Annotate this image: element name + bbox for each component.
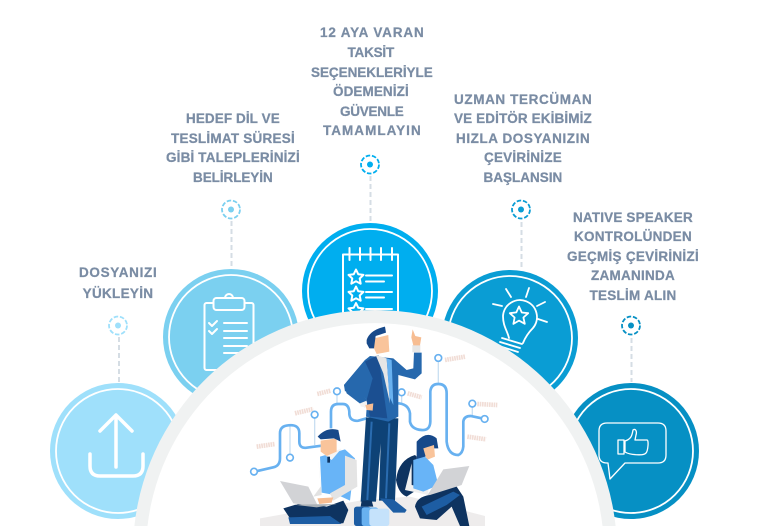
connector: step 3: [370, 176, 372, 222]
text: step 2: [166, 111, 300, 185]
text: step 4: BAŞLANSIN: [484, 170, 562, 185]
platform: [260, 497, 485, 526]
text: step 5: ZAMANINDA: [591, 268, 675, 283]
text: step 3: ÖDEMENİZİ: [333, 84, 409, 99]
seated man with laptop: [280, 429, 357, 524]
text: step 3: SEÇENEKLERİYLE: [311, 65, 433, 80]
text: step 5: KONTROLÜNDEN: [574, 229, 692, 244]
text: step 4: HIZLA DOSYANIZIN: [456, 131, 590, 146]
text: step 1: [79, 265, 157, 301]
text: step 1: DOSYANIZI: [79, 265, 157, 280]
text: step 5: [567, 210, 699, 303]
step 1 circle: upload: [50, 383, 186, 519]
text: step 4: VE EDİTÖR EKİBİMİZ: [454, 111, 592, 126]
icon: speech bubble with thumb: [599, 423, 666, 479]
text: step 2: BELİRLEYİN: [193, 170, 273, 185]
text: step 5: TESLİM ALIN: [590, 288, 676, 303]
icon: upload: [90, 415, 143, 476]
text: step 1: YÜKLEYİN: [83, 286, 153, 301]
icon: light bulb: [493, 288, 547, 352]
marker: step 1: [109, 316, 127, 334]
marker: step 5: [622, 316, 640, 334]
connector: step 1: [118, 337, 120, 382]
central arc panel: [134, 310, 616, 526]
illustration: team with circuit: [251, 327, 497, 526]
text: step 5: NATIVE SPEAKER: [573, 210, 693, 225]
text: step 3: GÜVENLE: [340, 104, 404, 119]
text: step 2: HEDEF DİL VE: [186, 111, 280, 126]
step 5 circle: thumbs up: [563, 383, 699, 519]
text: step 3: 12 AYA VARAN: [320, 25, 424, 40]
text: step 4: [454, 92, 592, 185]
text: step 4: ÇEVİRİNİZE: [484, 150, 562, 165]
step 2 circle: clipboard: [163, 269, 299, 405]
connector: step 2: [230, 221, 232, 268]
text: step 5: GEÇMİŞ ÇEVİRİNİZİ: [567, 249, 699, 264]
standing man: [344, 327, 422, 513]
marker: step 2: [222, 200, 240, 218]
circuit background: [251, 355, 497, 475]
connector: step 5: [630, 338, 632, 382]
marker: step 4: [512, 200, 530, 218]
text: step 2: GİBİ TALEPLERİNİZİ: [166, 150, 300, 165]
step 3 circle: notepad: [302, 223, 438, 359]
marker: step 3: [361, 156, 379, 174]
text: step 4: UZMAN TERCÜMAN: [454, 92, 592, 107]
text: step 3: TAMAMLAYIN: [323, 123, 421, 138]
icon: clipboard: [204, 294, 254, 370]
icon: notepad: [343, 248, 398, 320]
connector: step 4: [520, 222, 522, 269]
text: step 3: TAKSİT: [348, 45, 395, 60]
text: step 3: [311, 25, 433, 138]
step 4 circle: light bulb: [442, 270, 578, 406]
bags: [354, 507, 389, 526]
text: step 2: TESLİMAT SÜRESİ: [171, 131, 295, 146]
seated woman with laptop: [396, 435, 469, 526]
